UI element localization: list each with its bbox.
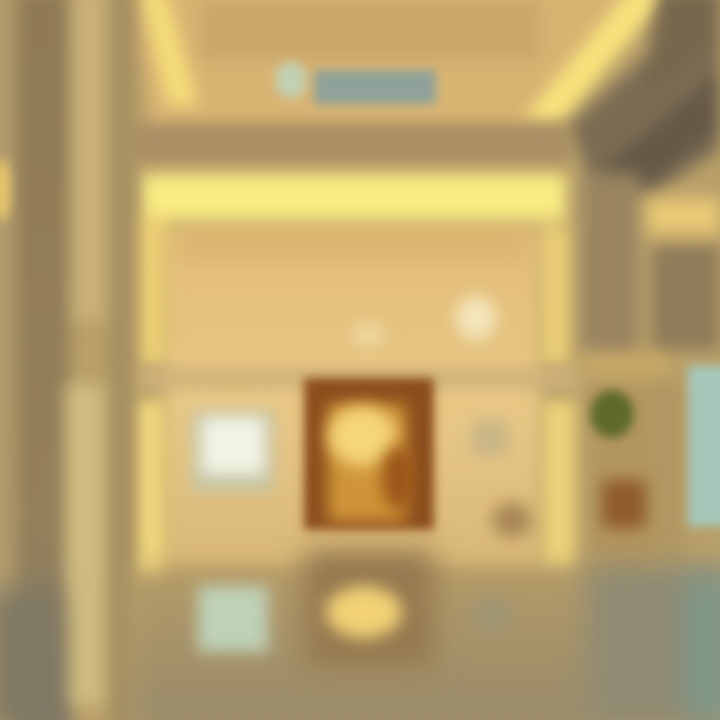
ceiling sign — [276, 62, 436, 104]
teal window — [688, 366, 720, 526]
beam under ceiling — [130, 124, 570, 162]
floor — [130, 572, 600, 720]
yellow light band — [134, 174, 576, 580]
upper wall shade — [175, 228, 530, 254]
planter — [602, 480, 646, 528]
back wall — [165, 225, 540, 570]
doorway — [304, 378, 434, 530]
ceiling — [130, 0, 680, 130]
left pillars — [0, 0, 134, 720]
wall picture — [192, 410, 274, 492]
right floor — [585, 565, 720, 720]
picture reflection — [198, 586, 268, 652]
left floor pillar base — [0, 590, 60, 720]
right columns and dark ceiling — [570, 0, 720, 575]
doorway reflection glow — [326, 586, 402, 638]
teal window reflection — [686, 575, 720, 720]
plant — [590, 390, 634, 438]
horizontal ledge — [130, 368, 580, 388]
doorway reflection — [304, 550, 434, 668]
left edge glow — [0, 158, 11, 222]
wall highlights — [352, 296, 532, 633]
